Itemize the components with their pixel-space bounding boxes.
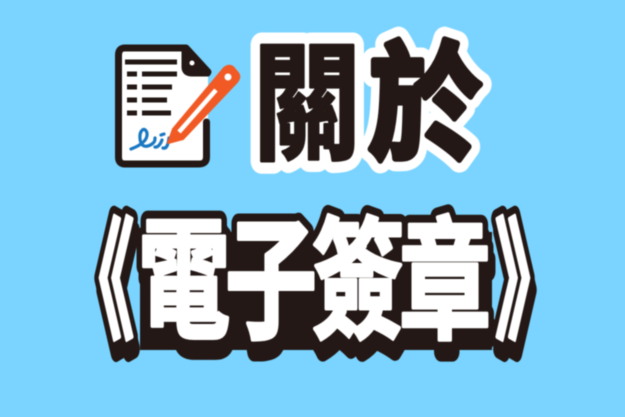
title shadow lower layer: 》 — [497, 221, 569, 369]
document outline — [118, 48, 208, 164]
pen highlight — [179, 90, 216, 132]
title drop shadow: 簽 — [312, 210, 404, 357]
heading outline — [253, 33, 482, 177]
title shadow lower layer: 章 — [401, 222, 493, 369]
title shadow lower layer — [64, 221, 569, 369]
heading: 關於 — [253, 33, 482, 177]
title glyphs — [62, 209, 567, 357]
title glyphs: 》 — [495, 209, 567, 357]
document text lines — [125, 62, 177, 113]
title shadow lower layer: 簽 — [314, 222, 406, 369]
title drop shadow — [62, 209, 567, 357]
title: 《電子簽章》 — [62, 209, 569, 369]
title drop shadow: 章 — [399, 210, 491, 357]
title shadow fill — [140, 232, 492, 350]
pen cap dot — [224, 74, 232, 80]
title shadow lower layer: 《 — [64, 221, 136, 369]
title drop shadow: 電 — [138, 210, 230, 357]
pen — [168, 66, 239, 143]
signature — [131, 129, 169, 149]
document sheet — [118, 48, 208, 165]
title shadow lower layer: 子 — [227, 222, 319, 369]
title drop shadow: 》 — [495, 209, 567, 357]
folded corner — [184, 50, 208, 74]
heading outline: 於 — [368, 33, 482, 176]
heading glyphs — [253, 33, 482, 177]
title glyphs: 《 — [62, 209, 134, 357]
heading glyphs: 於 — [368, 33, 482, 176]
title drop shadow: 子 — [225, 210, 317, 357]
title glyphs: 子 — [225, 210, 317, 357]
title glyphs: 章 — [399, 210, 491, 357]
fold highlight — [190, 60, 194, 66]
heading outline: 關 — [253, 34, 361, 177]
title glyphs: 簽 — [312, 210, 404, 357]
title drop shadow: 《 — [62, 209, 134, 357]
icon: document with signature and pen — [118, 48, 239, 165]
title glyphs: 電 — [138, 210, 230, 357]
heading glyphs: 關 — [253, 34, 361, 177]
title shadow lower layer: 電 — [140, 222, 232, 369]
